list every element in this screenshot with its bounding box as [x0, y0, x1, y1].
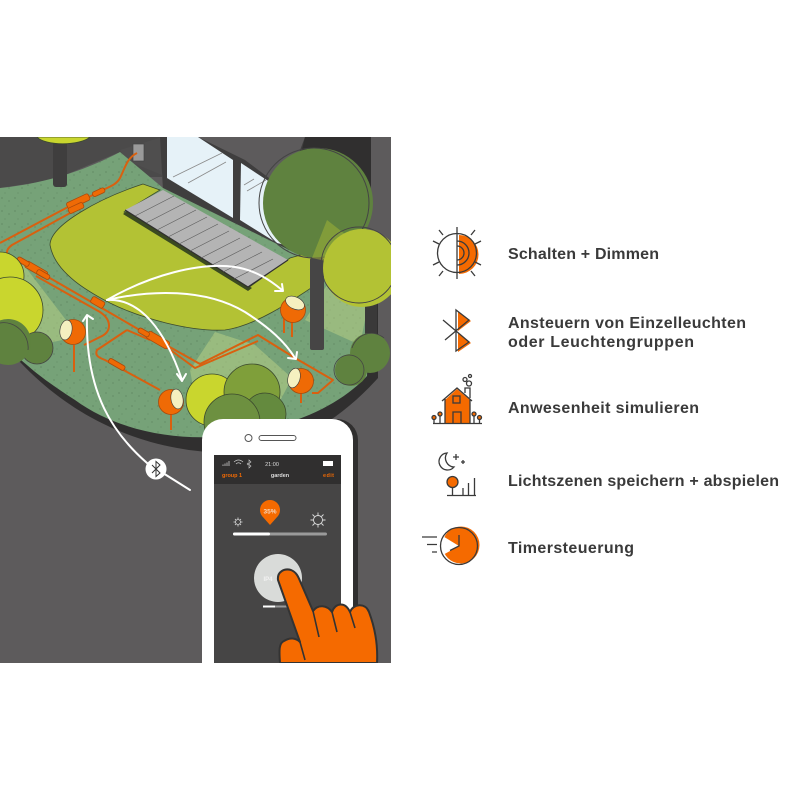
light beams on lawn — [0, 260, 368, 425]
icon: house — [432, 374, 482, 424]
icon: moon and tree — [439, 453, 476, 496]
status bar: 21:00 — [265, 462, 279, 468]
large sun icon — [310, 512, 326, 528]
lamp: bottom — [158, 388, 185, 414]
lamp: top right — [280, 293, 307, 322]
patio lawn — [50, 184, 335, 330]
feature: switch and dim — [433, 227, 659, 279]
small sun icon — [234, 518, 242, 526]
feature: presence simulation — [432, 374, 699, 424]
status bar: garden — [271, 473, 290, 479]
lamp: left — [58, 319, 86, 344]
feature: light scenes — [439, 453, 779, 496]
right tree — [320, 226, 391, 307]
lawn — [0, 152, 372, 437]
earpiece and camera — [245, 434, 296, 442]
wire connectors — [16, 187, 170, 371]
dim value pin: 35% — [263, 508, 277, 516]
status bar — [214, 455, 341, 484]
icon: bluetooth — [443, 310, 471, 352]
icon: clock — [422, 526, 480, 564]
brightness slider — [233, 532, 327, 536]
on/off button — [254, 554, 302, 608]
label: Schalten + Dimmen — [508, 246, 659, 263]
control arrows — [83, 266, 297, 490]
status bar: group 1 — [222, 473, 242, 479]
status bar: edit — [323, 473, 334, 479]
bottom trees — [186, 364, 286, 430]
hand pointer — [278, 569, 377, 663]
socket — [133, 144, 144, 161]
window panes — [167, 137, 285, 245]
feature: single lights or groups — [443, 310, 746, 352]
label: Anwesenheit simulieren — [508, 400, 699, 417]
left trees — [0, 252, 53, 365]
right bushes — [334, 333, 390, 386]
top-left tree — [37, 137, 90, 187]
illustration: garden scene — [0, 137, 401, 663]
label line 2: oder Leuchtengruppen — [508, 334, 694, 351]
icon: half sun — [433, 227, 481, 279]
house wall — [0, 137, 371, 255]
wires — [0, 153, 333, 430]
on/off button: IP4 — [263, 577, 273, 583]
finger separators — [300, 611, 355, 660]
screen — [214, 484, 341, 663]
phone — [202, 419, 377, 663]
bluetooth badge — [146, 458, 166, 480]
label: Lichtszenen speichern + abspielen — [508, 473, 779, 490]
label: Ansteuern von Einzelleuchten — [508, 315, 746, 332]
lamp: lower right — [286, 367, 314, 394]
trunk and tree: large tree — [259, 148, 377, 350]
feature: timer — [422, 526, 634, 564]
label: Timersteuerung — [508, 540, 634, 557]
lawn shadow — [0, 300, 378, 453]
door mat — [123, 190, 288, 291]
dim value pin — [260, 500, 280, 525]
